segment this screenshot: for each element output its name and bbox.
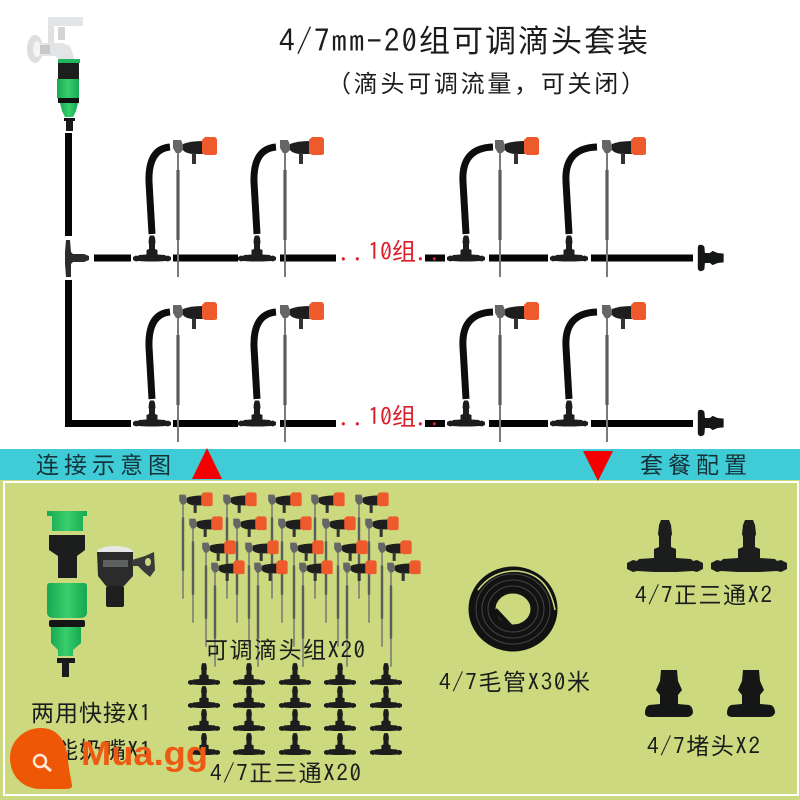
end cap row 2 [698, 410, 724, 436]
band label: connection diagram: 连接示意图 [36, 446, 171, 480]
row 2 main line [173, 420, 693, 427]
row 1 group count: . [431, 232, 438, 267]
title: 4/7mm-20组可调滴头套装 [279, 16, 648, 61]
panel: package contents [0, 480, 800, 800]
row 2 group count: 10 [368, 404, 392, 428]
row 1 drippers [133, 137, 646, 277]
label: large tee fittings: 4/7正三通X2 [635, 576, 772, 610]
row 1 group count: . [354, 232, 361, 267]
icon: end plugs [645, 670, 775, 717]
row 1 main line [94, 254, 693, 262]
label: faucet adapter: 万能奶嘴X1 [31, 731, 151, 765]
watermark: Mua.gg [10, 728, 208, 789]
row 2 group count: . [431, 397, 438, 432]
end cap row 1 [698, 245, 724, 271]
label: dripper set: 可调滴头组X20 [205, 631, 365, 665]
label: capillary tube: 4/7毛管X30米 [439, 663, 590, 697]
band label: package contents: 套餐配置 [640, 446, 747, 480]
row 2 group count: . [417, 397, 424, 432]
label: end plugs: 4/7堵头X2 [647, 727, 760, 761]
icon: universal faucet adapter [97, 546, 155, 607]
icon: large tee fittings [627, 520, 787, 572]
label: quick connector: 两用快接X1 [31, 694, 151, 728]
icon: two-way quick connector [47, 511, 87, 677]
band [0, 449, 800, 480]
lower supply pipe [68, 280, 131, 424]
row 1 group count: 组 [392, 232, 416, 267]
arrow down [583, 451, 613, 481]
icon: capillary tube coil [476, 571, 555, 644]
dripper set [179, 492, 421, 667]
icon: green quick connector on faucet [57, 59, 80, 131]
vertical supply pipe [65, 133, 72, 236]
subtitle: （滴头可调流量，可关闭） [327, 64, 645, 99]
row 2 group count: . [340, 397, 347, 432]
row 1 group count: 10 [368, 239, 392, 263]
watermark: Mua.gg: Mua.gg [81, 735, 208, 773]
branch tee [65, 240, 89, 277]
row 2 group count: 组 [392, 397, 416, 432]
arrow up [192, 448, 222, 479]
row 2 drippers [133, 302, 646, 442]
icon: faucet [27, 17, 83, 63]
row 1 group count: . [417, 232, 424, 267]
row 1 group count: . [340, 232, 347, 267]
row 2 group count: . [354, 397, 361, 432]
label: tee set: 4/7正三通X20 [210, 754, 361, 788]
tee set [188, 663, 402, 755]
